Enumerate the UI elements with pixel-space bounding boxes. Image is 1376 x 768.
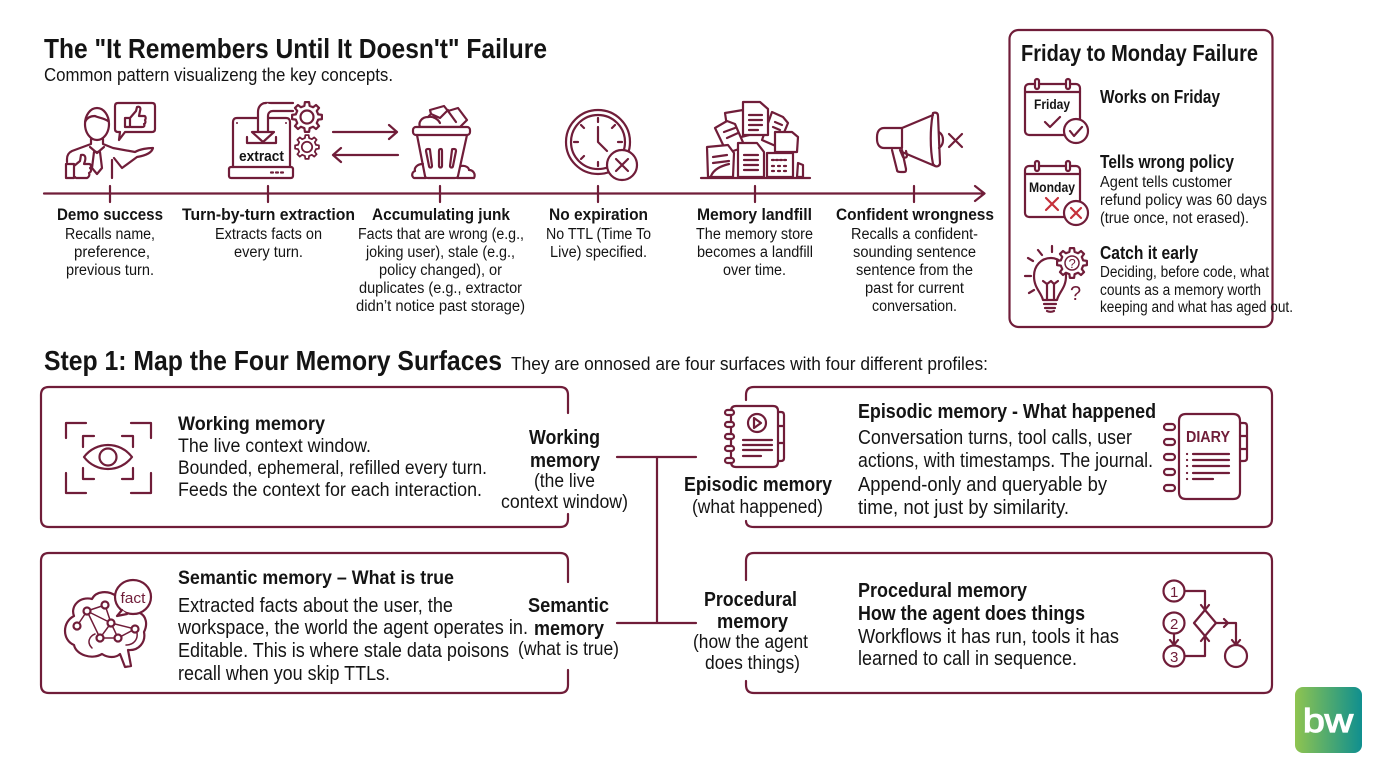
text: procedural memory: How the agent does things — [858, 603, 1085, 625]
icon: Friday calendar: Friday — [1034, 97, 1070, 112]
label: procedural memory: memory — [717, 611, 789, 633]
text: working memory — [178, 413, 487, 501]
label: semantic memory: (what is true) — [518, 639, 619, 660]
timeline step: demo success: Recalls name, — [65, 226, 155, 243]
icon: diary notebook — [1164, 414, 1247, 499]
text: episodic memory: Episodic memory - What happened — [858, 401, 1156, 423]
text: semantic memory: Semantic memory – What is true — [178, 567, 454, 589]
timeline arrow — [44, 186, 984, 202]
panel: working memory — [41, 387, 568, 527]
label: extract: extract — [239, 149, 284, 165]
icon: eye in focus frame — [66, 423, 151, 493]
text: episodic memory: Append-only and queryable by — [858, 474, 1107, 496]
timeline step: confident wrongness: past for current — [865, 280, 965, 297]
text: episodic memory: Conversation turns, tool calls, user — [858, 427, 1132, 449]
timeline step: no expiration — [546, 205, 651, 261]
timeline step: accumulating junk: didn’t notice past storage) — [356, 298, 525, 315]
timeline step: turn-by-turn extraction — [182, 205, 355, 261]
icon: overflowing trash bin — [412, 106, 475, 178]
panel heading: Friday to Monday Failure — [1021, 40, 1258, 66]
icon: diary notebook: DIARY — [1186, 429, 1231, 446]
label: procedural memory: does things) — [705, 653, 800, 674]
timeline step: memory landfill: The memory store — [696, 226, 813, 243]
timeline step: demo success — [57, 205, 163, 279]
icon: numbered workflow: 3 — [1170, 649, 1178, 666]
timeline step: memory landfill: becomes a landfill — [697, 244, 813, 261]
connector between memory surfaces — [617, 457, 696, 623]
text: tells wrong policy: Tells wrong policy — [1100, 152, 1234, 172]
timeline step: accumulating junk: Facts that are wrong (e.g., — [358, 226, 524, 243]
text: working memory: Working memory — [178, 413, 325, 435]
label: working memory — [501, 427, 628, 513]
icon: numbered workflow — [1164, 580, 1247, 667]
title: The "It Remembers Until It Doesn't" Failure — [44, 33, 547, 64]
text: episodic memory: actions, with timestamps. The journal. — [858, 450, 1153, 472]
text: catch it early: Deciding, before code, what — [1100, 264, 1270, 281]
label: semantic memory: Semantic — [528, 595, 609, 617]
icon: megaphone with x — [877, 113, 962, 172]
timeline step: confident wrongness: Recalls a confident- — [851, 226, 978, 243]
timeline step: confident wrongness: conversation. — [872, 298, 957, 315]
text: procedural memory — [858, 580, 1119, 670]
icon: episodic notebook with play button — [725, 406, 784, 467]
panel: Friday to Monday Failure — [1010, 30, 1293, 327]
icon: Friday calendar — [1025, 79, 1088, 143]
icon: extract machine with gears — [229, 102, 322, 178]
timeline step: confident wrongness: Confident wrongness — [836, 205, 994, 224]
label: episodic memory: Episodic memory — [684, 474, 833, 496]
text: working memory: The live context window. — [178, 435, 371, 457]
icon: numbered workflow: 1 — [1170, 584, 1178, 601]
arrows between extract and junk — [333, 125, 398, 162]
heading: Step 1: Step 1: Map the Four Memory Surfaces — [44, 345, 502, 376]
label: working memory: memory — [530, 450, 601, 472]
text: catch it early: counts as a memory worth — [1100, 282, 1261, 299]
icon: brain with fact bubble: fact — [120, 590, 146, 607]
icon: numbered workflow: 2 — [1170, 616, 1178, 633]
timeline step: accumulating junk: joking user), stale (e.g., — [365, 244, 515, 261]
timeline step: no expiration: Live) specified. — [550, 244, 647, 261]
text: working memory: Feeds the context for each interaction. — [178, 479, 482, 501]
timeline step: accumulating junk: Accumulating junk — [372, 205, 510, 224]
icon: Monday calendar — [1025, 161, 1088, 225]
text: catch it early — [1100, 243, 1293, 316]
icon: light bulb with gear and question mark: ? — [1070, 283, 1081, 305]
icon: presenter with thumbs up — [66, 103, 155, 178]
timeline step: no expiration: No TTL (Time To — [546, 226, 651, 243]
timeline step: confident wrongness: sounding sentence — [853, 244, 976, 261]
timeline step: demo success: preference, — [74, 244, 150, 261]
label: episodic memory — [684, 474, 833, 518]
timeline step: memory landfill: over time. — [723, 262, 786, 279]
icon: light bulb with gear and question mark — [1025, 246, 1087, 312]
text: semantic memory — [177, 567, 528, 685]
label: procedural memory: Procedural — [704, 589, 797, 611]
timeline step: memory landfill — [696, 205, 813, 279]
text: episodic memory: time, not just by similarity. — [858, 497, 1069, 519]
text: works on Friday: Works on Friday — [1100, 87, 1220, 107]
timeline step: accumulating junk: duplicates (e.g., extractor — [359, 280, 522, 297]
icon: clock with x badge — [566, 110, 637, 180]
timeline step: turn-by-turn extraction: Turn-by-turn extraction — [182, 205, 355, 224]
timeline step: confident wrongness: sentence from the — [856, 262, 973, 279]
panel: episodic memory — [746, 387, 1272, 527]
timeline step: demo success: previous turn. — [66, 262, 154, 279]
panel: procedural memory — [746, 553, 1272, 693]
gear small — [295, 135, 319, 159]
timeline step: accumulating junk: policy changed), or — [379, 262, 502, 279]
text: tells wrong policy: Agent tells customer — [1100, 174, 1232, 191]
heading note: They are onnosed are four surfaces with four different profiles: — [511, 354, 988, 374]
timeline step: no expiration: No expiration — [549, 205, 648, 224]
text: catch it early: Catch it early — [1100, 243, 1198, 263]
timeline step: memory landfill: Memory landfill — [697, 205, 812, 224]
text: episodic memory — [858, 401, 1156, 519]
icon: pile of documents — [701, 102, 810, 178]
text: semantic memory: recall when you skip TTLs. — [178, 663, 390, 685]
subtitle: Common pattern visualizeng the key concepts. — [44, 65, 393, 85]
timeline step: confident wrongness — [836, 205, 994, 315]
label: procedural memory — [693, 589, 809, 674]
text: procedural memory: Procedural memory — [858, 580, 1028, 602]
label: working memory: context window) — [501, 492, 628, 513]
label: semantic memory: memory — [534, 618, 605, 640]
text: working memory: Bounded, ephemeral, refilled every turn. — [178, 457, 487, 479]
timeline step: turn-by-turn extraction: Extracts facts on — [215, 226, 322, 243]
icon: Monday calendar: Monday — [1029, 180, 1075, 195]
label: working memory: (the live — [534, 471, 595, 492]
text: procedural memory: Workflows it has run, tools it has — [858, 626, 1119, 648]
logo: bw: bw — [1303, 702, 1353, 739]
icon: light bulb with gear and question mark: ? — [1068, 256, 1076, 271]
label: semantic memory — [518, 595, 619, 660]
label: procedural memory: (how the agent — [693, 632, 809, 653]
text: semantic memory: Extracted facts about the user, the — [178, 595, 453, 617]
text: catch it early: keeping and what has aged out. — [1100, 299, 1293, 316]
panel: semantic memory — [41, 553, 568, 693]
gear large — [292, 102, 322, 132]
text: tells wrong policy: (true once, not erased). — [1100, 210, 1249, 227]
text: tells wrong policy: refund policy was 60 days — [1100, 192, 1267, 209]
timeline step: turn-by-turn extraction: every turn. — [234, 244, 303, 261]
text: semantic memory: Editable. This is where stale data poisons — [178, 640, 509, 662]
label: working memory: Working — [529, 427, 600, 449]
icon: brain with fact bubble — [65, 580, 151, 667]
label: episodic memory: (what happened) — [692, 497, 823, 518]
logo: bw — [1295, 687, 1362, 753]
text: procedural memory: learned to call in sequence. — [858, 648, 1077, 670]
text: semantic memory: workspace, the world the agent operates in. — [177, 617, 528, 639]
text: tells wrong policy — [1100, 152, 1267, 227]
timeline step: demo success: Demo success — [57, 205, 163, 224]
timeline step: accumulating junk — [356, 205, 525, 315]
